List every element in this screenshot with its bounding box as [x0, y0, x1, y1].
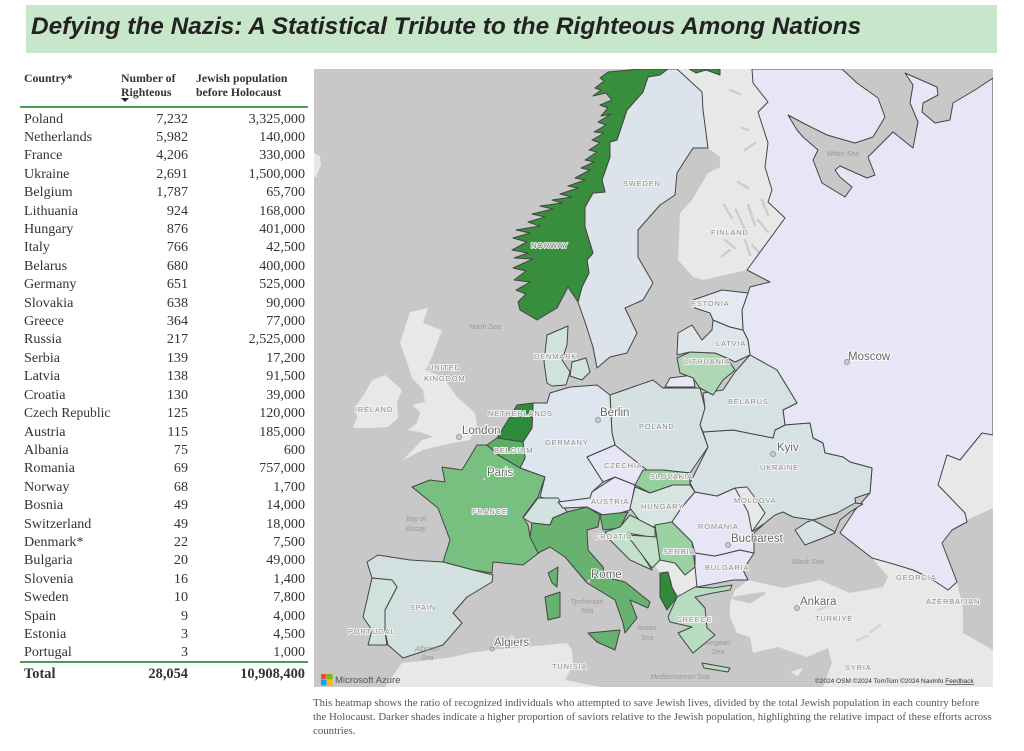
data table: 18,000 — [266, 516, 305, 532]
data table: 876 — [167, 221, 188, 237]
data table: 2,525,000 — [249, 331, 305, 347]
data table: 1,787 — [156, 184, 188, 200]
Czechia — [587, 445, 647, 485]
data table: Serbia — [24, 350, 60, 366]
data table: Estonia — [24, 626, 66, 642]
data table: 5,982 — [156, 129, 188, 145]
map labels: SERBIA — [663, 547, 695, 556]
explanatory note: the Holocaust. Darker shades indicate a higher proportion of saviors relative to the Jewish population, highlighting the relative impact of these efforts across — [313, 711, 992, 723]
data table: 3 — [181, 644, 188, 660]
map labels: LITHUANIA — [684, 357, 730, 366]
map labels: HUNGARY — [641, 502, 684, 511]
data table: 3 — [181, 626, 188, 642]
data table: 68 — [174, 479, 188, 495]
table header: Country* — [24, 71, 73, 85]
map labels: Mediterranean Sea — [650, 674, 710, 681]
title: Defying the Nazis: A Statistical Tribute to the Righteous Among Nations — [31, 13, 861, 40]
data table: 400,000 — [259, 258, 305, 274]
data table: Russia — [24, 331, 62, 347]
data table: 651 — [167, 276, 188, 292]
map labels: LATVIA — [716, 339, 746, 348]
map labels: CROATIA — [594, 532, 632, 541]
map attribution: ©2024 OSM ©2024 TomTom ©2024 NavInfo Feedback — [815, 677, 975, 685]
Romania — [672, 488, 765, 556]
Croatia — [605, 515, 655, 570]
map labels: FINLAND — [711, 228, 749, 237]
data table: 1,700 — [273, 479, 305, 495]
Hungary — [630, 485, 695, 527]
Microsoft Azure logo: Microsoft Azure — [335, 675, 400, 686]
data table: 2,691 — [156, 166, 188, 182]
data table: 1,400 — [273, 571, 305, 587]
data table: 14,000 — [266, 497, 305, 513]
Spain — [367, 555, 493, 658]
data table: 39,000 — [266, 387, 305, 403]
data table: 4,206 — [156, 147, 188, 163]
map labels: Aegean — [705, 640, 730, 647]
data table: 91,500 — [266, 368, 305, 384]
map labels: Berlin — [600, 407, 629, 419]
data table: 364 — [167, 313, 188, 329]
data table: 7,500 — [273, 534, 305, 550]
data table: Portugal — [24, 644, 72, 660]
map labels: GERMANY — [545, 438, 589, 447]
map labels: SYRIA — [845, 663, 872, 672]
data table: Albania — [24, 442, 69, 458]
map labels: UKRAINE — [760, 463, 799, 472]
Italy — [530, 507, 650, 650]
North Africa — [385, 643, 600, 687]
data table: 120,000 — [259, 405, 305, 421]
data table: Belgium — [24, 184, 73, 200]
map labels: White Sea — [827, 151, 859, 158]
map labels: BULGARIA — [705, 563, 749, 572]
map labels: Kyiv — [777, 442, 799, 454]
Finland — [677, 69, 785, 280]
heatmap of Europe — [314, 69, 993, 687]
data table: Germany — [24, 276, 76, 292]
map labels: UNITED — [428, 363, 461, 372]
map labels: Biscay — [406, 526, 427, 533]
data table: Ukraine — [24, 166, 69, 182]
data table: 766 — [167, 239, 188, 255]
data table: Spain — [24, 608, 56, 624]
data table: 22 — [174, 534, 188, 550]
map labels: Bay of — [406, 516, 427, 523]
data table: Denmark* — [24, 534, 84, 550]
table header — [24, 71, 288, 102]
data table: Sweden — [24, 589, 69, 605]
data table: Slovakia — [24, 295, 73, 311]
map labels: SPAIN — [410, 603, 436, 612]
data table: 49 — [174, 516, 188, 532]
data table — [20, 71, 308, 682]
data table: 217 — [167, 331, 188, 347]
map labels: POLAND — [639, 422, 675, 431]
map labels: TÜRKIYE — [815, 614, 853, 623]
map labels: AUSTRIA — [591, 497, 629, 506]
Ireland — [353, 375, 402, 428]
map labels: ROMANIA — [698, 522, 739, 531]
data table: 1,500,000 — [249, 166, 305, 182]
map labels: AZERBAIJAN — [926, 597, 980, 606]
data table: Slovenia — [24, 571, 73, 587]
data table: 638 — [167, 295, 188, 311]
Switzerland — [523, 498, 567, 525]
table header: before Holocaust — [196, 84, 281, 98]
map labels: Paris — [487, 467, 513, 479]
Poland — [610, 380, 708, 473]
Azov sea — [813, 503, 863, 532]
map labels: BELGIUM — [494, 446, 533, 455]
Russia — [742, 69, 993, 590]
Denmark — [544, 326, 570, 386]
map labels: London — [462, 425, 500, 437]
map labels: Rome — [591, 569, 622, 581]
map labels: NORWAY — [531, 241, 569, 250]
table header: Jewish population — [196, 71, 287, 85]
data table: 42,500 — [266, 239, 305, 255]
map labels — [348, 151, 980, 681]
Ukraine — [690, 423, 872, 545]
United Kingdom — [400, 308, 477, 460]
Slovakia — [635, 470, 690, 493]
Caucasus north — [938, 433, 993, 520]
map labels: Black Sea — [792, 559, 824, 566]
data table: 7,800 — [273, 589, 305, 605]
Belarus — [700, 355, 797, 438]
map labels: Sea — [581, 608, 593, 615]
data table: Czech Republic — [24, 405, 110, 420]
map labels: FRANCE — [472, 507, 508, 516]
data table: 115 — [167, 424, 188, 440]
data table: 330,000 — [259, 147, 305, 163]
data table: 130 — [167, 387, 188, 403]
data table: Greece — [24, 313, 64, 329]
Moldova — [735, 487, 765, 530]
data table: Lithuania — [24, 203, 78, 219]
France — [412, 445, 545, 573]
Kaliningrad — [665, 375, 695, 387]
data table: 4,500 — [273, 626, 305, 642]
map labels: PORTUGAL — [348, 627, 396, 636]
data table: 140,000 — [259, 129, 305, 145]
data table: 125 — [167, 405, 188, 421]
data table: Switzerland — [24, 516, 91, 532]
data table: Belarus — [24, 258, 67, 274]
explanatory note — [313, 697, 992, 737]
map labels: ESTONIA — [691, 299, 729, 308]
table total row: Total — [24, 666, 55, 682]
Austria — [558, 477, 635, 517]
table total row — [24, 666, 305, 682]
map labels: Ionian — [637, 625, 657, 632]
data table: 20 — [174, 552, 188, 568]
Serbia — [655, 522, 695, 575]
data table: Romania — [24, 460, 75, 476]
data table: 185,000 — [259, 424, 305, 440]
table total row: 10,908,400 — [240, 666, 305, 682]
data table: 69 — [174, 460, 188, 476]
map labels: BELARUS — [728, 397, 769, 406]
map labels: Sea — [712, 649, 724, 656]
data table: 17,200 — [266, 350, 305, 366]
Norway — [512, 69, 668, 320]
Slovenia — [600, 512, 628, 530]
data table: Bulgaria — [24, 552, 73, 568]
Estonia — [693, 290, 748, 330]
map labels: KINGDOM — [424, 374, 465, 383]
data table: 10 — [174, 589, 188, 605]
map labels: Sea — [641, 635, 653, 642]
explanatory note: This heatmap shows the ratio of recognized individuals who attempted to save Jewish lives, divided by the total Jewish population in each country before — [313, 697, 979, 709]
data table: 90,000 — [266, 295, 305, 311]
title — [26, 5, 997, 53]
map labels: SWEDEN — [623, 179, 661, 188]
map labels: NETHERLANDS — [488, 409, 553, 418]
map labels: DENMARK — [534, 352, 577, 361]
data table: 49,000 — [266, 552, 305, 568]
table total row: 28,054 — [148, 666, 188, 682]
data table: 9 — [181, 608, 188, 624]
data table: 924 — [167, 203, 188, 219]
data table: 65,700 — [266, 184, 305, 200]
data table: Latvia — [24, 368, 60, 384]
data table: Bosnia — [24, 497, 63, 513]
data table: 75 — [174, 442, 188, 458]
data table: 401,000 — [259, 221, 305, 237]
data table: 77,000 — [266, 313, 305, 329]
explanatory note: countries. — [313, 725, 355, 737]
Germany — [520, 385, 615, 502]
Belgium — [487, 438, 525, 468]
map labels: CZECHIA — [604, 461, 643, 470]
Greece — [668, 585, 732, 672]
Latvia — [677, 320, 750, 362]
Portugal — [363, 578, 397, 645]
Albania — [660, 572, 677, 610]
data table: 49 — [174, 497, 188, 513]
Finland lakes and inland water — [722, 90, 880, 640]
map labels: Sea — [421, 655, 433, 662]
map labels: Tyrrhenian — [571, 599, 604, 606]
data table: 7,232 — [156, 110, 188, 126]
data table: Poland — [24, 110, 63, 126]
data table: 4,000 — [273, 608, 305, 624]
data table: 680 — [167, 258, 188, 274]
map labels: IRELAND — [355, 405, 393, 414]
data table: 757,000 — [259, 460, 305, 476]
map labels: GEORGIA — [896, 573, 937, 582]
data table: Norway — [24, 479, 69, 495]
map labels: Ankara — [800, 596, 837, 608]
data table: Netherlands — [24, 129, 92, 145]
Bosnia — [627, 535, 660, 568]
data table: Austria — [24, 424, 66, 440]
Bulgaria — [695, 550, 754, 587]
data table: 600 — [284, 442, 305, 458]
base land: non-data countries — [314, 69, 993, 687]
map labels: SLOVAKIA — [650, 472, 693, 481]
Turkey and Middle East — [730, 558, 993, 687]
data table: Italy — [24, 239, 50, 255]
table header: Righteous — [121, 84, 171, 98]
data table: Hungary — [24, 221, 73, 237]
data table: Croatia — [24, 387, 65, 403]
Lithuania — [677, 352, 735, 395]
Netherlands — [497, 403, 533, 442]
map labels: Bucharest — [731, 533, 784, 545]
map labels: GREECE — [676, 615, 712, 624]
data table: 16 — [174, 571, 188, 587]
data table: 168,000 — [259, 203, 305, 219]
table header: Number of — [121, 71, 176, 85]
map labels: Alboran — [414, 646, 439, 653]
Balkans — [652, 560, 697, 592]
map labels: North Sea — [469, 324, 501, 331]
data table: 3,325,000 — [249, 110, 305, 126]
data table: 139 — [167, 350, 188, 366]
map labels: MOLDOVA — [734, 496, 777, 505]
data table: 1,000 — [273, 644, 305, 660]
map labels: TUNISIA — [552, 662, 587, 671]
map labels: Algiers — [494, 637, 529, 649]
data table: 525,000 — [259, 276, 305, 292]
data table: France — [24, 147, 62, 163]
data table: 138 — [167, 368, 188, 384]
Sweden — [578, 69, 708, 368]
map labels: Moscow — [848, 351, 891, 363]
